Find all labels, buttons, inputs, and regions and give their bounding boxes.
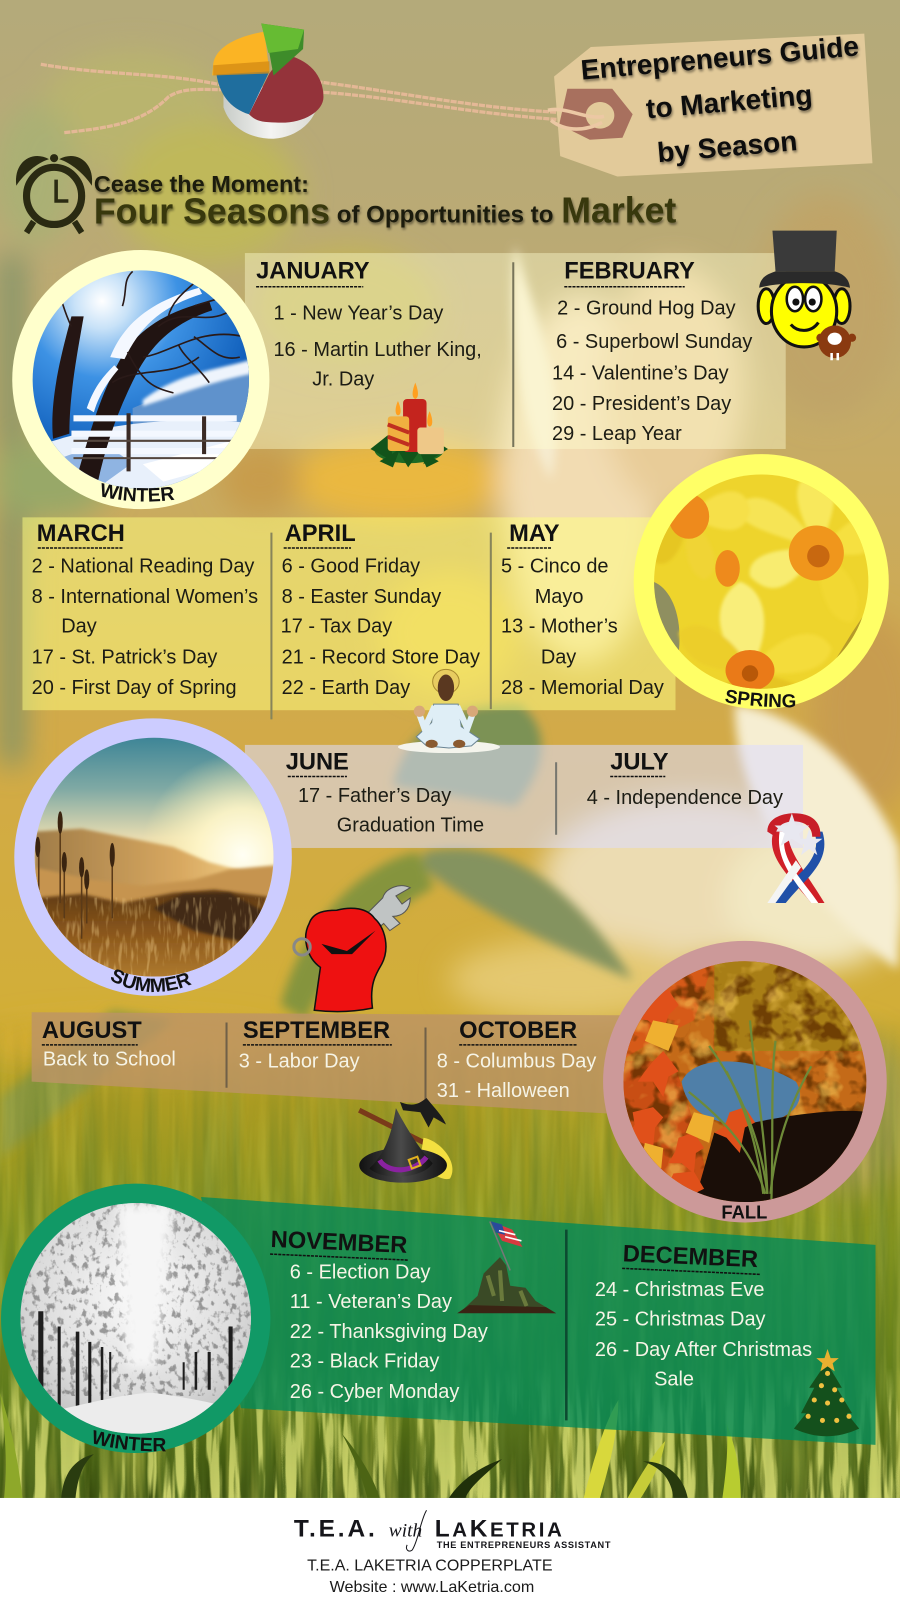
tag title text	[579, 30, 860, 168]
footer band	[0, 1498, 900, 1600]
June dates: 17 - Father’s Day	[298, 785, 451, 807]
April dates	[281, 555, 480, 699]
heading: August: AUGUST	[42, 1018, 142, 1044]
heading: March: MARCH	[37, 521, 125, 547]
May dates: Day	[541, 646, 576, 668]
panel: August September October	[32, 1012, 622, 1120]
heading: November: NOVEMBER	[270, 1227, 408, 1259]
heading: October: OCTOBER	[459, 1018, 577, 1044]
May dates: 28 - Memorial Day	[501, 677, 664, 699]
heading: Cease the Moment	[94, 171, 676, 231]
February dates	[552, 297, 752, 445]
icon: red fist with wrench	[294, 886, 410, 1012]
panel: June and July	[245, 745, 803, 848]
footer website: Website : www.LaKetria.com	[330, 1578, 534, 1596]
October dates: 31 - Halloween	[437, 1080, 570, 1102]
May dates: Mayo	[535, 586, 583, 608]
icon: seated Jesus on cloud	[398, 669, 500, 753]
photo circle: spring	[634, 454, 889, 710]
May dates: 13 - Mother’s	[501, 616, 618, 638]
May dates	[501, 555, 664, 699]
June dates	[298, 785, 484, 837]
December dates: Sale	[654, 1369, 694, 1391]
April dates: 6 - Good Friday	[282, 555, 420, 577]
August dates: Back to School	[43, 1048, 176, 1070]
November dates: 22 - Thanksgiving Day	[290, 1321, 488, 1343]
heading: June: JUNE	[286, 749, 349, 775]
January dates: 1 - New Year’s Day	[273, 302, 443, 324]
March dates: 20 - First Day of Spring	[32, 677, 237, 699]
icon: groundhog buddy with top hat	[758, 231, 856, 360]
March dates: 8 - International Women’s	[32, 586, 258, 608]
February dates: 2 - Ground Hog Day	[557, 297, 736, 319]
January dates: Jr. Day	[312, 369, 374, 391]
icon: Christmas tree with star	[794, 1349, 859, 1436]
footer logo	[294, 1510, 611, 1551]
December dates	[595, 1279, 812, 1391]
panel: March April May	[22, 517, 676, 719]
February dates: 14 - Valentine’s Day	[552, 363, 729, 385]
icon: patriotic ribbon	[767, 813, 824, 903]
icon: 3D pie chart	[212, 23, 323, 139]
footer logo: LAKETRIA	[435, 1516, 564, 1543]
heading: September: SEPTEMBER	[243, 1018, 390, 1044]
photo circle: winter	[12, 250, 270, 510]
label: winter: WINTER	[94, 1430, 166, 1452]
heading: January: JANUARY	[256, 259, 370, 285]
label: spring: SPRING	[725, 690, 796, 708]
March dates: 17 - St. Patrick’s Day	[32, 646, 217, 668]
March dates: Day	[61, 616, 97, 638]
twine strings	[41, 64, 571, 133]
footer logo: T.E.A.	[294, 1516, 378, 1543]
label: summer: SUMMER	[111, 970, 192, 992]
May dates: 5 - Cinco de	[501, 555, 609, 577]
heading: Cease the Moment: Market	[561, 190, 676, 230]
icon: alarm clock	[16, 154, 92, 233]
February dates: 6 - Superbowl Sunday	[556, 331, 752, 353]
footer logo: with	[389, 1521, 422, 1542]
March dates: 2 - National Reading Day	[32, 555, 254, 577]
November dates	[290, 1262, 488, 1403]
icon: candles with holly	[370, 383, 448, 467]
panel: January and February	[245, 253, 786, 449]
icon: Iwo Jima memorial with flag	[457, 1221, 556, 1313]
title tag	[548, 30, 872, 177]
April dates: 17 - Tax Day	[281, 616, 392, 638]
icon: witch hat and broom with bat	[359, 1098, 452, 1183]
December dates: 24 - Christmas Eve	[595, 1279, 764, 1301]
November dates: 26 - Cyber Monday	[290, 1381, 459, 1403]
December dates: 26 - Day After Christmas	[595, 1339, 812, 1361]
grass blades	[0, 1393, 741, 1498]
April dates: 21 - Record Store Day	[282, 646, 480, 668]
March dates	[32, 555, 258, 699]
heading: Cease the Moment: Cease the Moment:	[94, 171, 309, 197]
footer logo: THE ENTREPRENEURS ASSISTANT	[437, 1540, 611, 1550]
heading: April: APRIL	[285, 521, 356, 547]
tag title text: Entrepreneurs Guide	[579, 30, 860, 86]
tag title text: to Marketing	[645, 79, 814, 124]
November dates: 23 - Black Friday	[290, 1350, 439, 1372]
October dates: 8 - Columbus Day	[437, 1050, 596, 1072]
July dates: 4 - Independence Day	[587, 787, 783, 809]
February dates: 29 - Leap Year	[552, 423, 682, 445]
panel: November and December	[201, 1197, 876, 1445]
photo circle: winter snow road	[1, 1184, 270, 1453]
January dates	[273, 302, 482, 391]
photo circle: fall	[603, 941, 887, 1222]
February dates: 20 - President’s Day	[552, 393, 731, 415]
tied knot	[548, 109, 604, 129]
label: winter: WINTER	[102, 483, 174, 502]
November dates: 6 - Election Day	[290, 1262, 431, 1284]
heading: December: DECEMBER	[622, 1241, 759, 1273]
tag title text: by Season	[656, 125, 798, 168]
heading: May: MAY	[509, 521, 560, 547]
October dates	[437, 1050, 596, 1102]
September dates: 3 - Labor Day	[239, 1050, 360, 1072]
April dates: 22 - Earth Day	[282, 677, 410, 699]
heading: Cease the Moment: Four Seasons	[94, 191, 330, 231]
June dates: Graduation Time	[337, 815, 484, 837]
December dates: 25 - Christmas Day	[595, 1309, 766, 1331]
heading: February: FEBRUARY	[564, 259, 695, 285]
November dates: 11 - Veteran’s Day	[290, 1291, 452, 1313]
heading: July: JULY	[610, 749, 669, 775]
heading: Cease the Moment: of Opportunities to	[337, 201, 553, 228]
photo circle: summer	[14, 718, 292, 996]
label: fall: FALL	[721, 1201, 767, 1222]
tag reinforcement ring	[559, 89, 633, 140]
footer company name: T.E.A. LAKETRIA COPPERPLATE	[307, 1556, 553, 1574]
April dates: 8 - Easter Sunday	[282, 586, 441, 608]
January dates: 16 - Martin Luther King,	[273, 339, 482, 361]
